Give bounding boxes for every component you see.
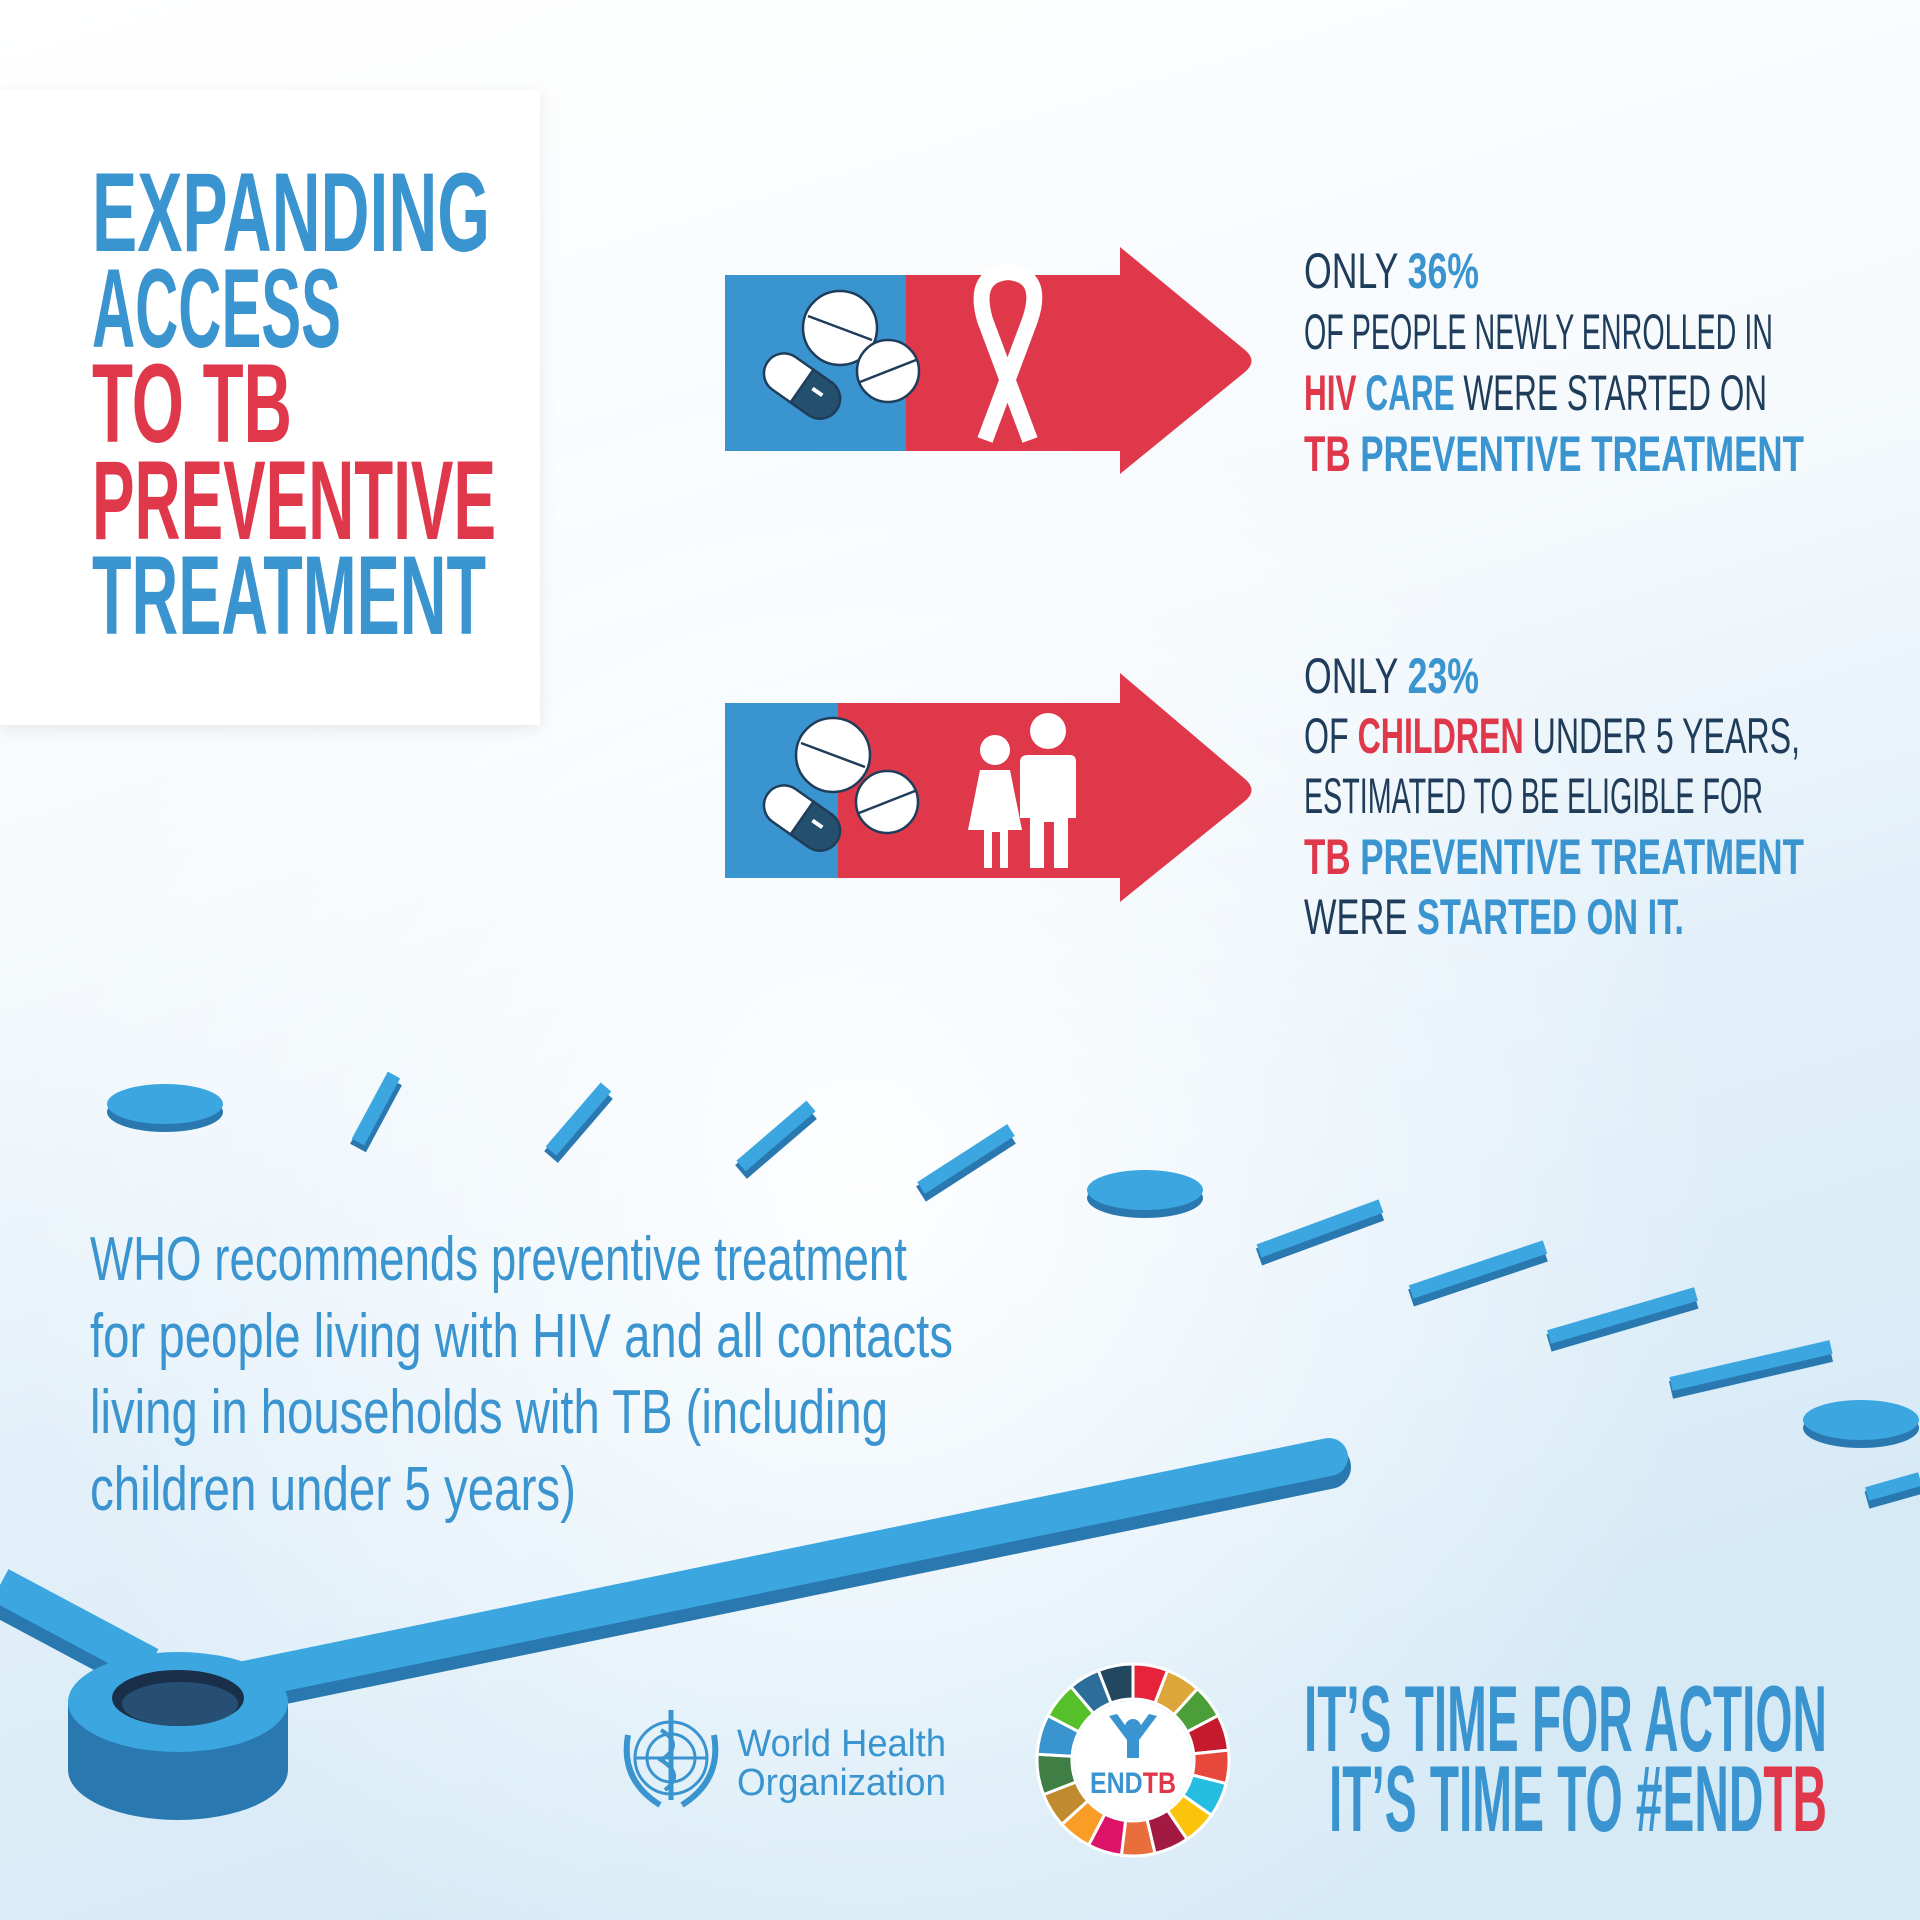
title: PREVENTIVE: [92, 438, 496, 563]
icon: family: [968, 713, 1076, 868]
arrow: HIV: [725, 247, 1252, 474]
text block: 23%: WERE STARTED ON IT.: [1304, 889, 1684, 945]
text block: 36%: [1304, 243, 1804, 482]
tagline: [1304, 1666, 1827, 1851]
logo: WHO: [627, 1710, 946, 1805]
text block: 36%: ONLY 36%: [1304, 243, 1479, 299]
title: [92, 150, 496, 658]
text block: WHO recommendation: for people living with HIV and all contacts: [90, 1302, 953, 1371]
text block: WHO recommendation: [90, 1225, 953, 1524]
title: TO TB: [92, 341, 292, 466]
title: ACCESS: [92, 246, 341, 371]
text block: WHO recommendation: WHO recommends preventive treatment: [90, 1225, 907, 1294]
text block: 23%: [1304, 648, 1804, 945]
logo: WHO: Organization: [737, 1762, 946, 1804]
text block: WHO recommendation: children under 5 years): [90, 1455, 576, 1524]
title: EXPANDING: [92, 150, 490, 275]
icon: pills: [756, 718, 918, 858]
logo: WHO: World Health: [737, 1723, 946, 1765]
clock graphic: [0, 1075, 1920, 1820]
icon: pills: [756, 291, 919, 426]
panel: title card: [0, 90, 540, 725]
title: TREATMENT: [92, 533, 486, 658]
arrow: children: [725, 673, 1252, 902]
text block: 23%: ONLY 23%: [1304, 648, 1479, 704]
logo: END TB ring: ENDTB: [1090, 1767, 1176, 1800]
text block: WHO recommendation: living in households with TB (including: [90, 1378, 888, 1447]
icon: ribbon: [982, 272, 1034, 440]
clock hands: [0, 1595, 150, 1675]
logo: END TB ring: [1037, 1664, 1229, 1856]
